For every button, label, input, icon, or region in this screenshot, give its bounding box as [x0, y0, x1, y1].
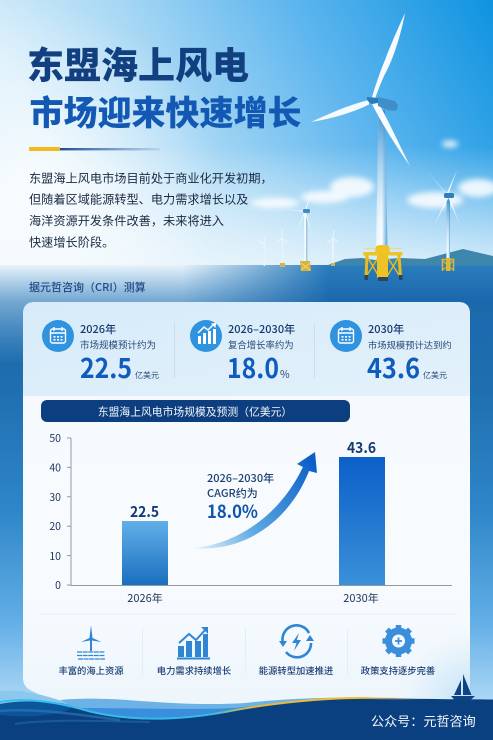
label: power demand: 电力需求持续增长 [157, 663, 231, 677]
chart header bar: 东盟海上风电市场规模及预测（亿美元） [98, 404, 292, 420]
CAGR callout [207, 470, 274, 524]
accent rule [29, 147, 160, 151]
CAGR callout: 2026–2030年 [207, 470, 274, 486]
icon: policy gear [382, 625, 414, 657]
axes: 10 [49, 549, 61, 564]
icon: calendar [42, 320, 74, 352]
bar: 2026: 2026年 [127, 590, 163, 606]
footer account name: 公众号：元哲咨询 [371, 711, 476, 730]
CAGR callout: 18.0% [207, 498, 258, 524]
bar: 2030: 2030年 [343, 590, 379, 606]
main panel background [23, 302, 470, 705]
panel: KPI CAGR [190, 320, 295, 386]
intro text: 但随着区域能源转型、电力需求增长以及 [29, 190, 248, 208]
axes [49, 431, 452, 593]
axes: 0 [55, 578, 61, 593]
intro text: 快速增长阶段。 [29, 232, 114, 250]
panel: KPI 2026: 亿美元 [135, 370, 159, 381]
light blue wave [60, 698, 440, 716]
title: 东盟海上风电 [27, 36, 249, 90]
icon: growth chart [190, 320, 222, 352]
label: marine resources: 丰富的海上资源 [58, 663, 124, 677]
intro text [29, 168, 273, 250]
label: policy support: 政策支持逐步完善 [361, 663, 435, 677]
panel: KPI 2026: 2026年 [80, 321, 116, 337]
panel: KPI 2030: 2030年 [368, 321, 404, 337]
panel: KPI CAGR: % [280, 367, 290, 382]
axes: 20 [49, 519, 61, 534]
pale wave left [0, 691, 130, 716]
title: 市场迎来快速增长 [30, 86, 302, 135]
panel: KPI 2030 [330, 320, 452, 386]
intro text: 海洋资源开发条件改善，未来将进入 [29, 211, 224, 229]
mid blue wave [80, 700, 340, 722]
right turbine [427, 170, 459, 271]
foundation [363, 245, 402, 281]
panel: KPI 2030: 市场规模预计达到约 [368, 338, 452, 352]
panel: KPI CAGR: 2026–2030年 [228, 321, 295, 337]
bar: 2030 [339, 437, 385, 606]
axes: 40 [49, 460, 61, 476]
icon: sailboat [451, 674, 475, 700]
panel: KPI CAGR: 复合增长率约为 [228, 338, 294, 352]
bar chart [49, 431, 452, 606]
chart header bar [41, 400, 350, 422]
panel: KPI 2030: 亿美元 [423, 370, 447, 381]
main wind turbine [311, 13, 410, 281]
panel: KPI 2026: 22.5 [80, 347, 132, 386]
label: energy transition: 能源转型加速推进 [259, 663, 333, 677]
panel: KPI 2026 [42, 320, 159, 386]
mid turbine [286, 185, 313, 271]
panel: KPI 2026: 市场规模预计约为 [80, 338, 156, 352]
distant wind turbines [258, 229, 338, 267]
axes: 30 [49, 490, 61, 505]
intro text: 东盟海上风电市场目前处于商业化开发初期， [29, 168, 273, 186]
footer waves [0, 691, 493, 740]
axes: 50 [49, 431, 61, 446]
drivers row [58, 625, 435, 677]
icon: calendar [330, 320, 362, 352]
navy footer [0, 698, 493, 740]
panel: KPI CAGR: 18.0 [227, 347, 279, 386]
bar: 2030: 43.6 [347, 437, 376, 458]
source note: 据元哲咨询（CRI）测算 [29, 279, 146, 295]
bar: 2026 [122, 501, 168, 606]
icon: energy transition [279, 625, 314, 657]
CAGR callout: CAGR约为 [207, 485, 258, 501]
panel: KPI 2030: 43.6 [367, 347, 420, 386]
icon: offshore wind [77, 625, 105, 659]
arrow: CAGR growth [193, 452, 317, 548]
title [27, 36, 302, 135]
wave highlight line [0, 698, 420, 719]
icon: power demand [177, 627, 210, 660]
bar: 2026: 22.5 [130, 501, 159, 522]
